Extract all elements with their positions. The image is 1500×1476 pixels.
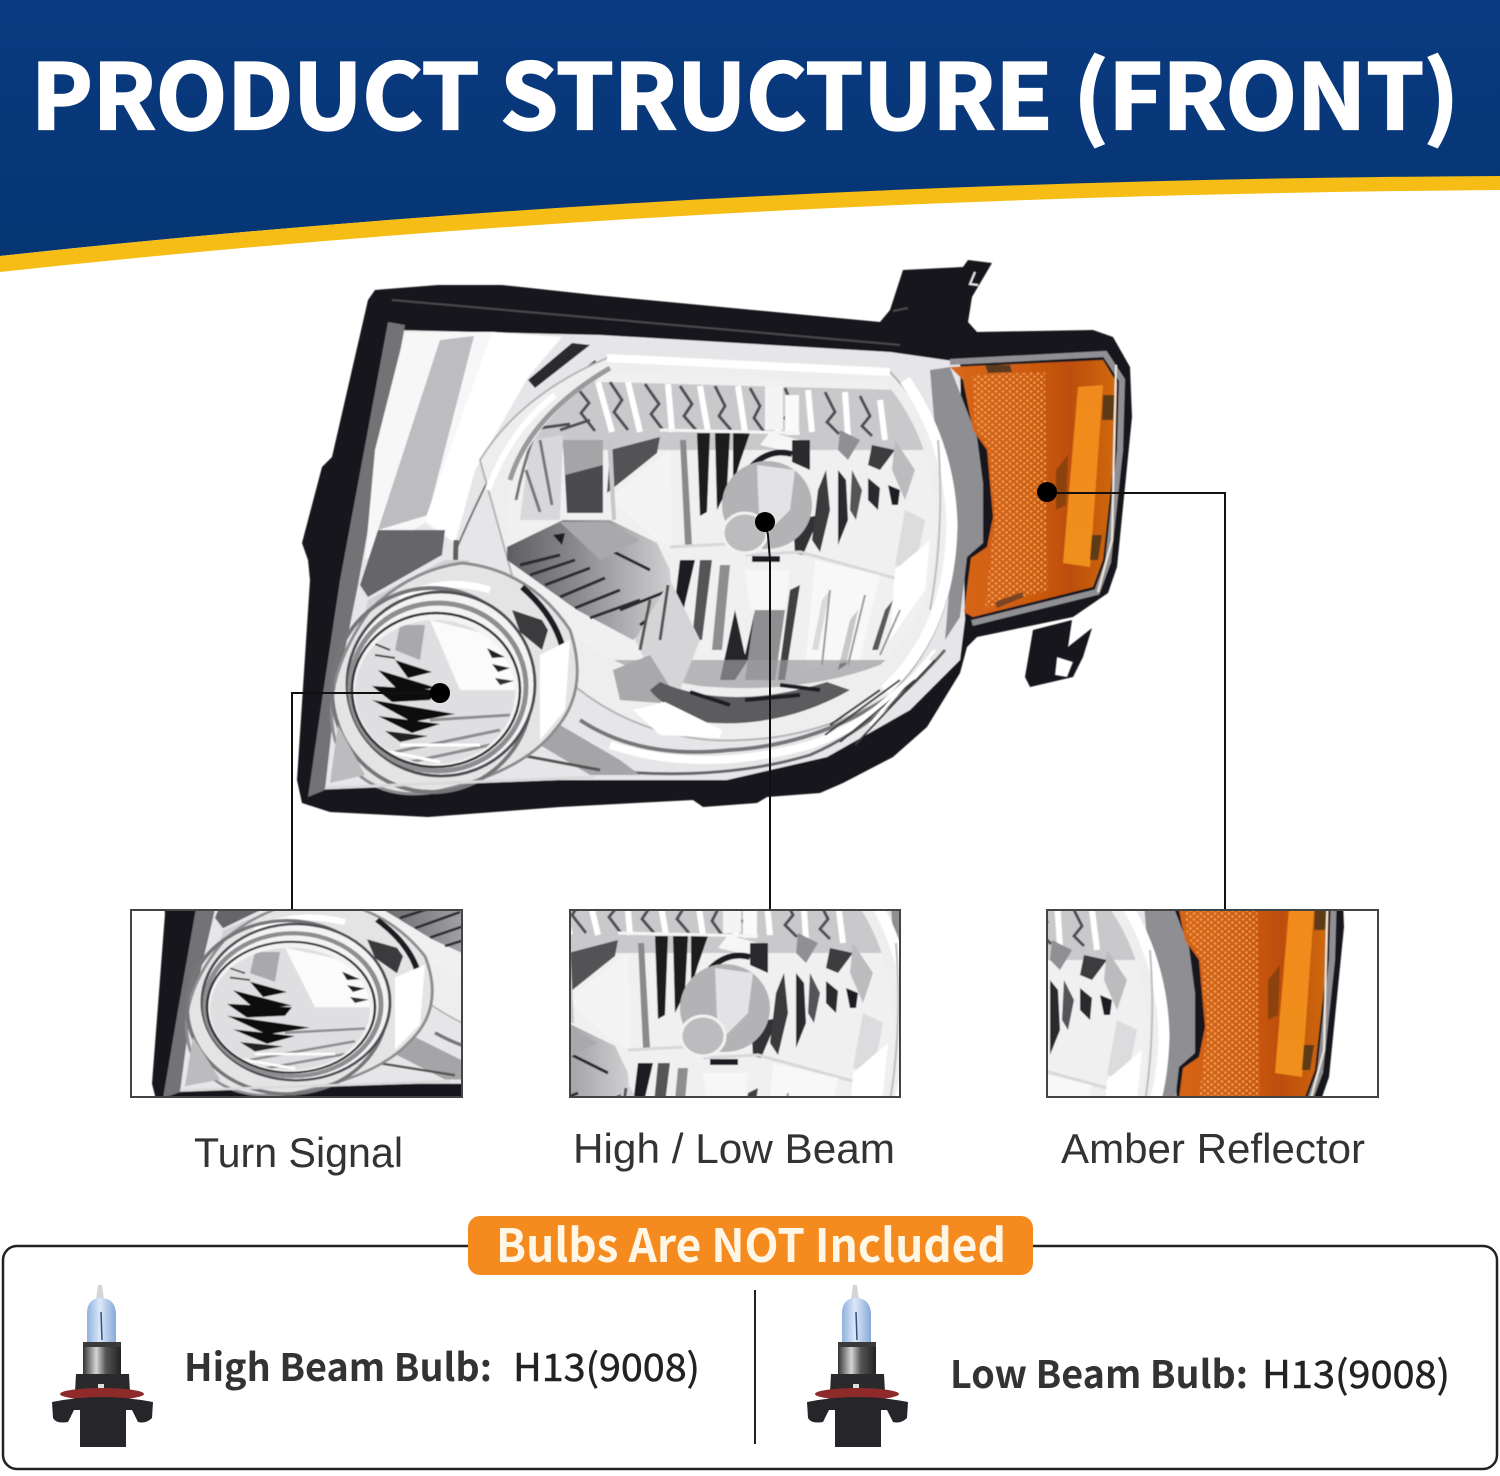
text: low beam bulb: H13(9008) (1262, 1344, 1450, 1399)
text: low beam bulb: Low Beam Bulb: (950, 1344, 1248, 1399)
leader line: amber reflector (1037, 482, 1225, 910)
text: high beam bulb: High Beam Bulb: (184, 1337, 492, 1392)
bulb info panel (3, 1246, 1497, 1469)
icon: low beam bulb (807, 1285, 908, 1447)
label: high / low beam: High / Low Beam (573, 1125, 895, 1172)
label: amber reflector: Amber Reflector (1061, 1125, 1365, 1172)
detail panel: turn signal (130, 909, 463, 1098)
leader line: high / low beam (755, 512, 775, 910)
headlight product image (297, 260, 1132, 817)
label: turn signal: Turn Signal (194, 1129, 403, 1176)
leader line: turn signal (292, 683, 450, 910)
text: high beam bulb: H13(9008) (513, 1337, 700, 1392)
header banner (0, 0, 1500, 272)
badge: bulbs are not included: Bulbs Are NOT Included (496, 1210, 1006, 1276)
icon: high beam bulb (52, 1285, 153, 1447)
title: PRODUCT STRUCTURE (FRONT) (31, 25, 1459, 155)
detail panel: amber reflector (1046, 909, 1379, 1098)
panel divider (754, 1290, 756, 1444)
detail panel: high / low beam (569, 909, 901, 1098)
